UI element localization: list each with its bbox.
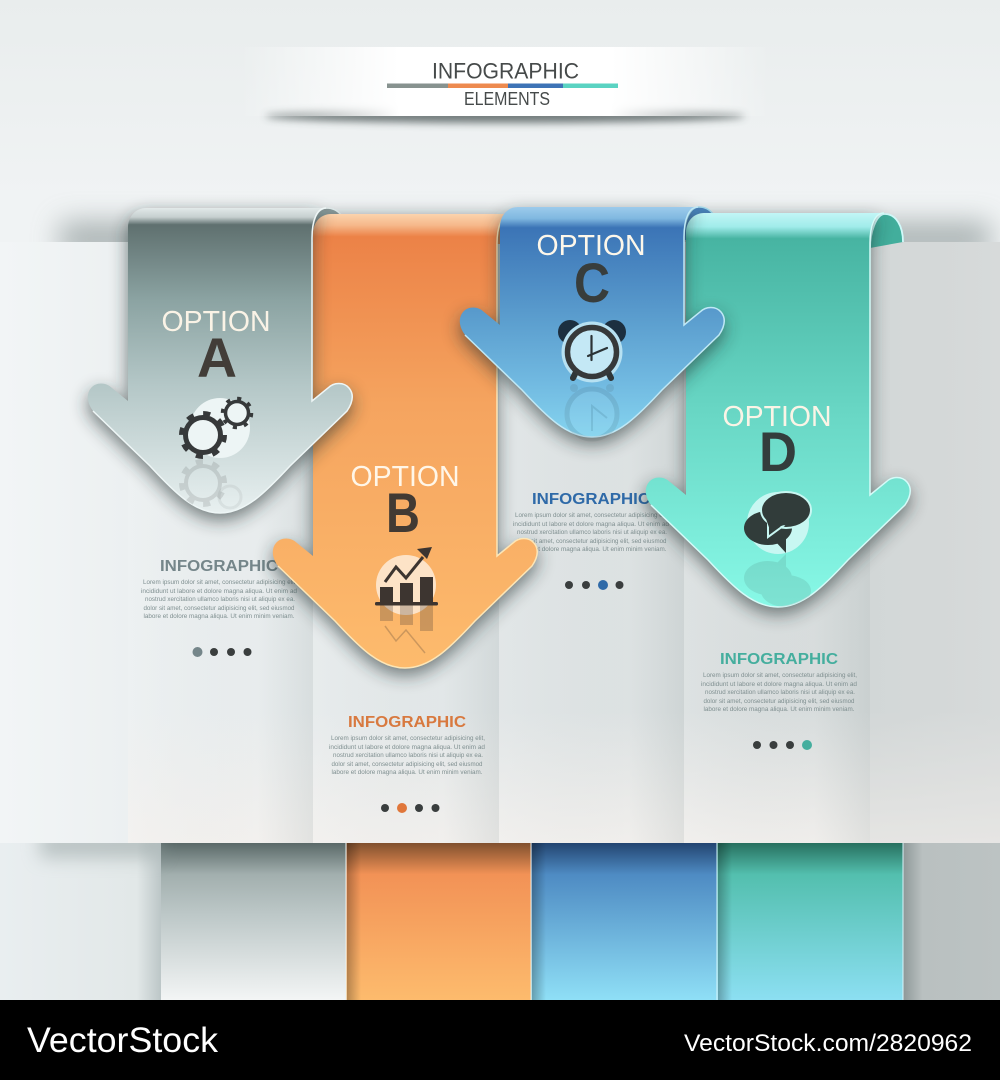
icon: gears	[182, 398, 251, 508]
label: option D: OPTION	[722, 401, 832, 433]
arrow ribbon B	[273, 214, 537, 675]
page dots A	[192, 647, 252, 657]
arrow ribbon C	[460, 207, 724, 444]
text block: option D	[701, 651, 857, 750]
text block: option D: labore et dolore magna aliqua. Ut enim minim veniam.	[704, 706, 855, 713]
text block: option B: labore et dolore magna aliqua. Ut enim minim veniam.	[332, 769, 483, 776]
icon: speech bubbles	[744, 492, 811, 607]
text block: option A: labore et dolore magna aliqua. Ut enim minim veniam.	[144, 613, 295, 620]
text block: option A: nostrud xercitation ullamco laboris nisi ut aliquip ex ea.	[145, 596, 295, 603]
text block: option A	[141, 558, 297, 657]
footer brand: VectorStock	[27, 1021, 219, 1060]
arrow ribbon A	[88, 208, 352, 520]
icon: bar chart with arrow	[375, 547, 438, 653]
title: infographic: INFOGRAPHIC	[432, 58, 579, 84]
text block: option D: INFOGRAPHIC	[720, 651, 838, 668]
text block: option C: Lorem ipsum dolor sit amet, consectetur adipisicing elit,	[515, 512, 669, 519]
main paper band	[0, 242, 1000, 843]
text block: option D: dolor sit amet, consectetur adipisicing elit, sed eiusmod	[704, 698, 855, 705]
text block: option A: INFOGRAPHIC	[160, 558, 278, 575]
text block: option A: Lorem ipsum dolor sit amet, consectetur adipisicing elit,	[143, 579, 297, 586]
header banner	[240, 47, 770, 123]
icon: alarm clock	[558, 320, 626, 439]
title: elements: ELEMENTS	[464, 89, 550, 109]
text block: option C: incididunt ut labore et dolore magna aliqua. Ut enim ad	[513, 521, 669, 528]
page dots D	[753, 740, 812, 750]
text block: option A: dolor sit amet, consectetur adipisicing elit, sed eiusmod	[144, 605, 295, 612]
footer url: VectorStock.com/2820962	[684, 1030, 972, 1057]
label: option B: OPTION	[350, 461, 460, 493]
text block: option D: nostrud xercitation ullamco laboris nisi ut aliquip ex ea.	[705, 689, 855, 696]
text block: option C: dolor sit amet, consectetur adipisicing elit, sed eiusmod	[516, 538, 667, 545]
text block: option C: INFOGRAPHIC	[532, 491, 650, 508]
text block: option C: nostrud xercitation ullamco laboris nisi ut aliquip ex ea.	[517, 529, 667, 536]
footer bar	[0, 1000, 1000, 1080]
page dots C	[565, 580, 624, 590]
text block: option B: dolor sit amet, consectetur adipisicing elit, sed eiusmod	[332, 761, 483, 768]
title colour rule	[387, 84, 618, 88]
fold: ribbon A back	[312, 208, 341, 240]
arrow ribbon D	[646, 213, 910, 614]
text block: option B: Lorem ipsum dolor sit amet, consectetur adipisicing elit,	[331, 735, 485, 742]
letter B: B	[386, 481, 420, 544]
text block: option B	[329, 714, 485, 813]
text block: option B: incididunt ut labore et dolore magna aliqua. Ut enim ad	[329, 744, 485, 751]
page dots B	[381, 803, 440, 813]
letter D: D	[759, 420, 797, 483]
letter C: C	[574, 251, 610, 314]
bottom colour strips	[0, 843, 1000, 1000]
letter A: A	[197, 326, 237, 389]
band top shadow	[60, 222, 990, 256]
text block: option A: incididunt ut labore et dolore magna aliqua. Ut enim ad	[141, 588, 297, 595]
text block: option D: Lorem ipsum dolor sit amet, consectetur adipisicing elit,	[703, 672, 857, 679]
label: option C: OPTION	[536, 230, 646, 262]
label: option A: OPTION	[162, 306, 270, 338]
text block: option B: nostrud xercitation ullamco laboris nisi ut aliquip ex ea.	[333, 752, 483, 759]
text block: option D: incididunt ut labore et dolore magna aliqua. Ut enim ad	[701, 681, 857, 688]
text block: option C	[513, 491, 669, 590]
text block: option B: INFOGRAPHIC	[348, 714, 466, 731]
text block: option C: labore et dolore magna aliqua. Ut enim minim veniam.	[516, 546, 667, 553]
strip left shadow	[40, 830, 161, 858]
fold: ribbon C back	[684, 207, 713, 240]
